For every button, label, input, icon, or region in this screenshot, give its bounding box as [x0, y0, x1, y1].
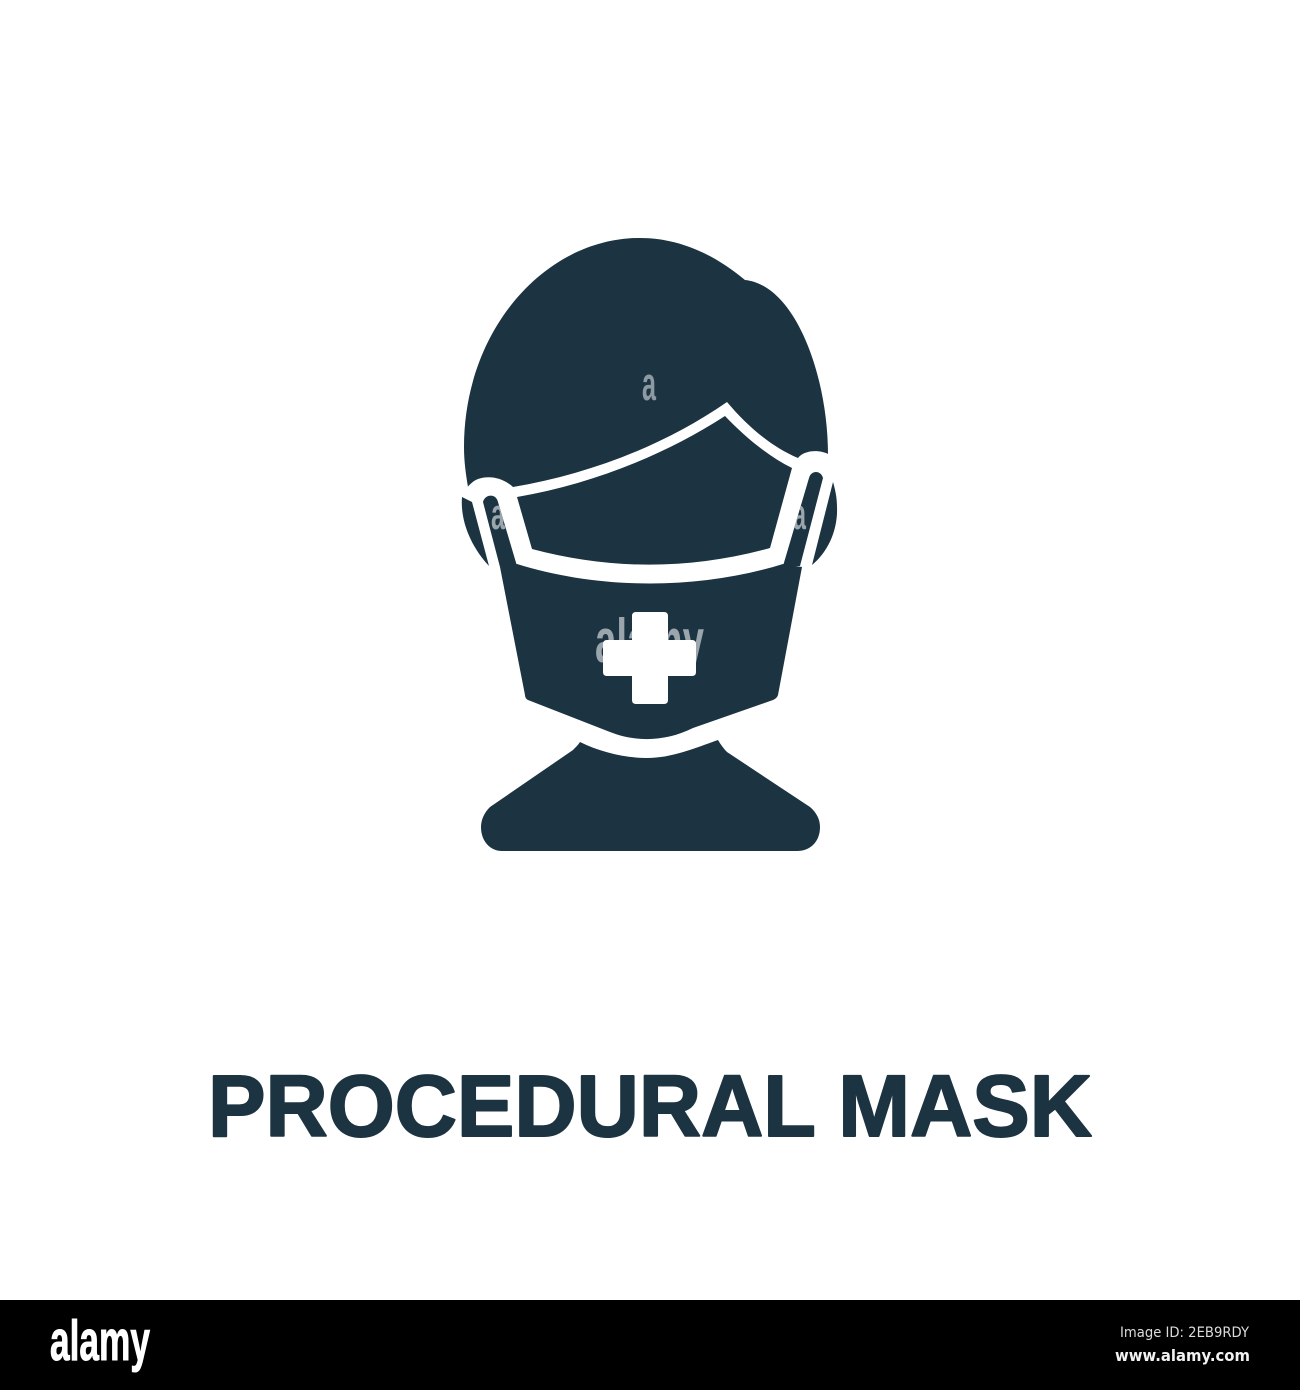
icon: person wearing procedural mask [460, 238, 837, 851]
watermark: left strap letter a: a [491, 490, 505, 539]
image id: Image ID: 2EB9RDY [1120, 1325, 1249, 1341]
left ear strap gap [483, 496, 517, 567]
watermark: right strap letter a: a [793, 490, 806, 539]
footer logo: alamy [50, 1309, 150, 1373]
footer bar [0, 1300, 1300, 1390]
shoulders [481, 740, 820, 851]
medical cross [603, 612, 696, 704]
left ear [462, 497, 489, 566]
upper face visible above mask [517, 416, 792, 565]
watermark: alamy behind cross: alamy [595, 607, 704, 676]
right ear strap gap [783, 472, 823, 566]
website: www.alamy.com [1115, 1346, 1250, 1365]
mask body [500, 564, 802, 739]
watermark: head letter a: a [642, 357, 656, 410]
title: PROCEDURAL MASK [208, 1058, 1092, 1155]
right ear [812, 482, 837, 565]
mask outline and ear straps [460, 402, 836, 570]
head and hair silhouette [464, 238, 828, 500]
